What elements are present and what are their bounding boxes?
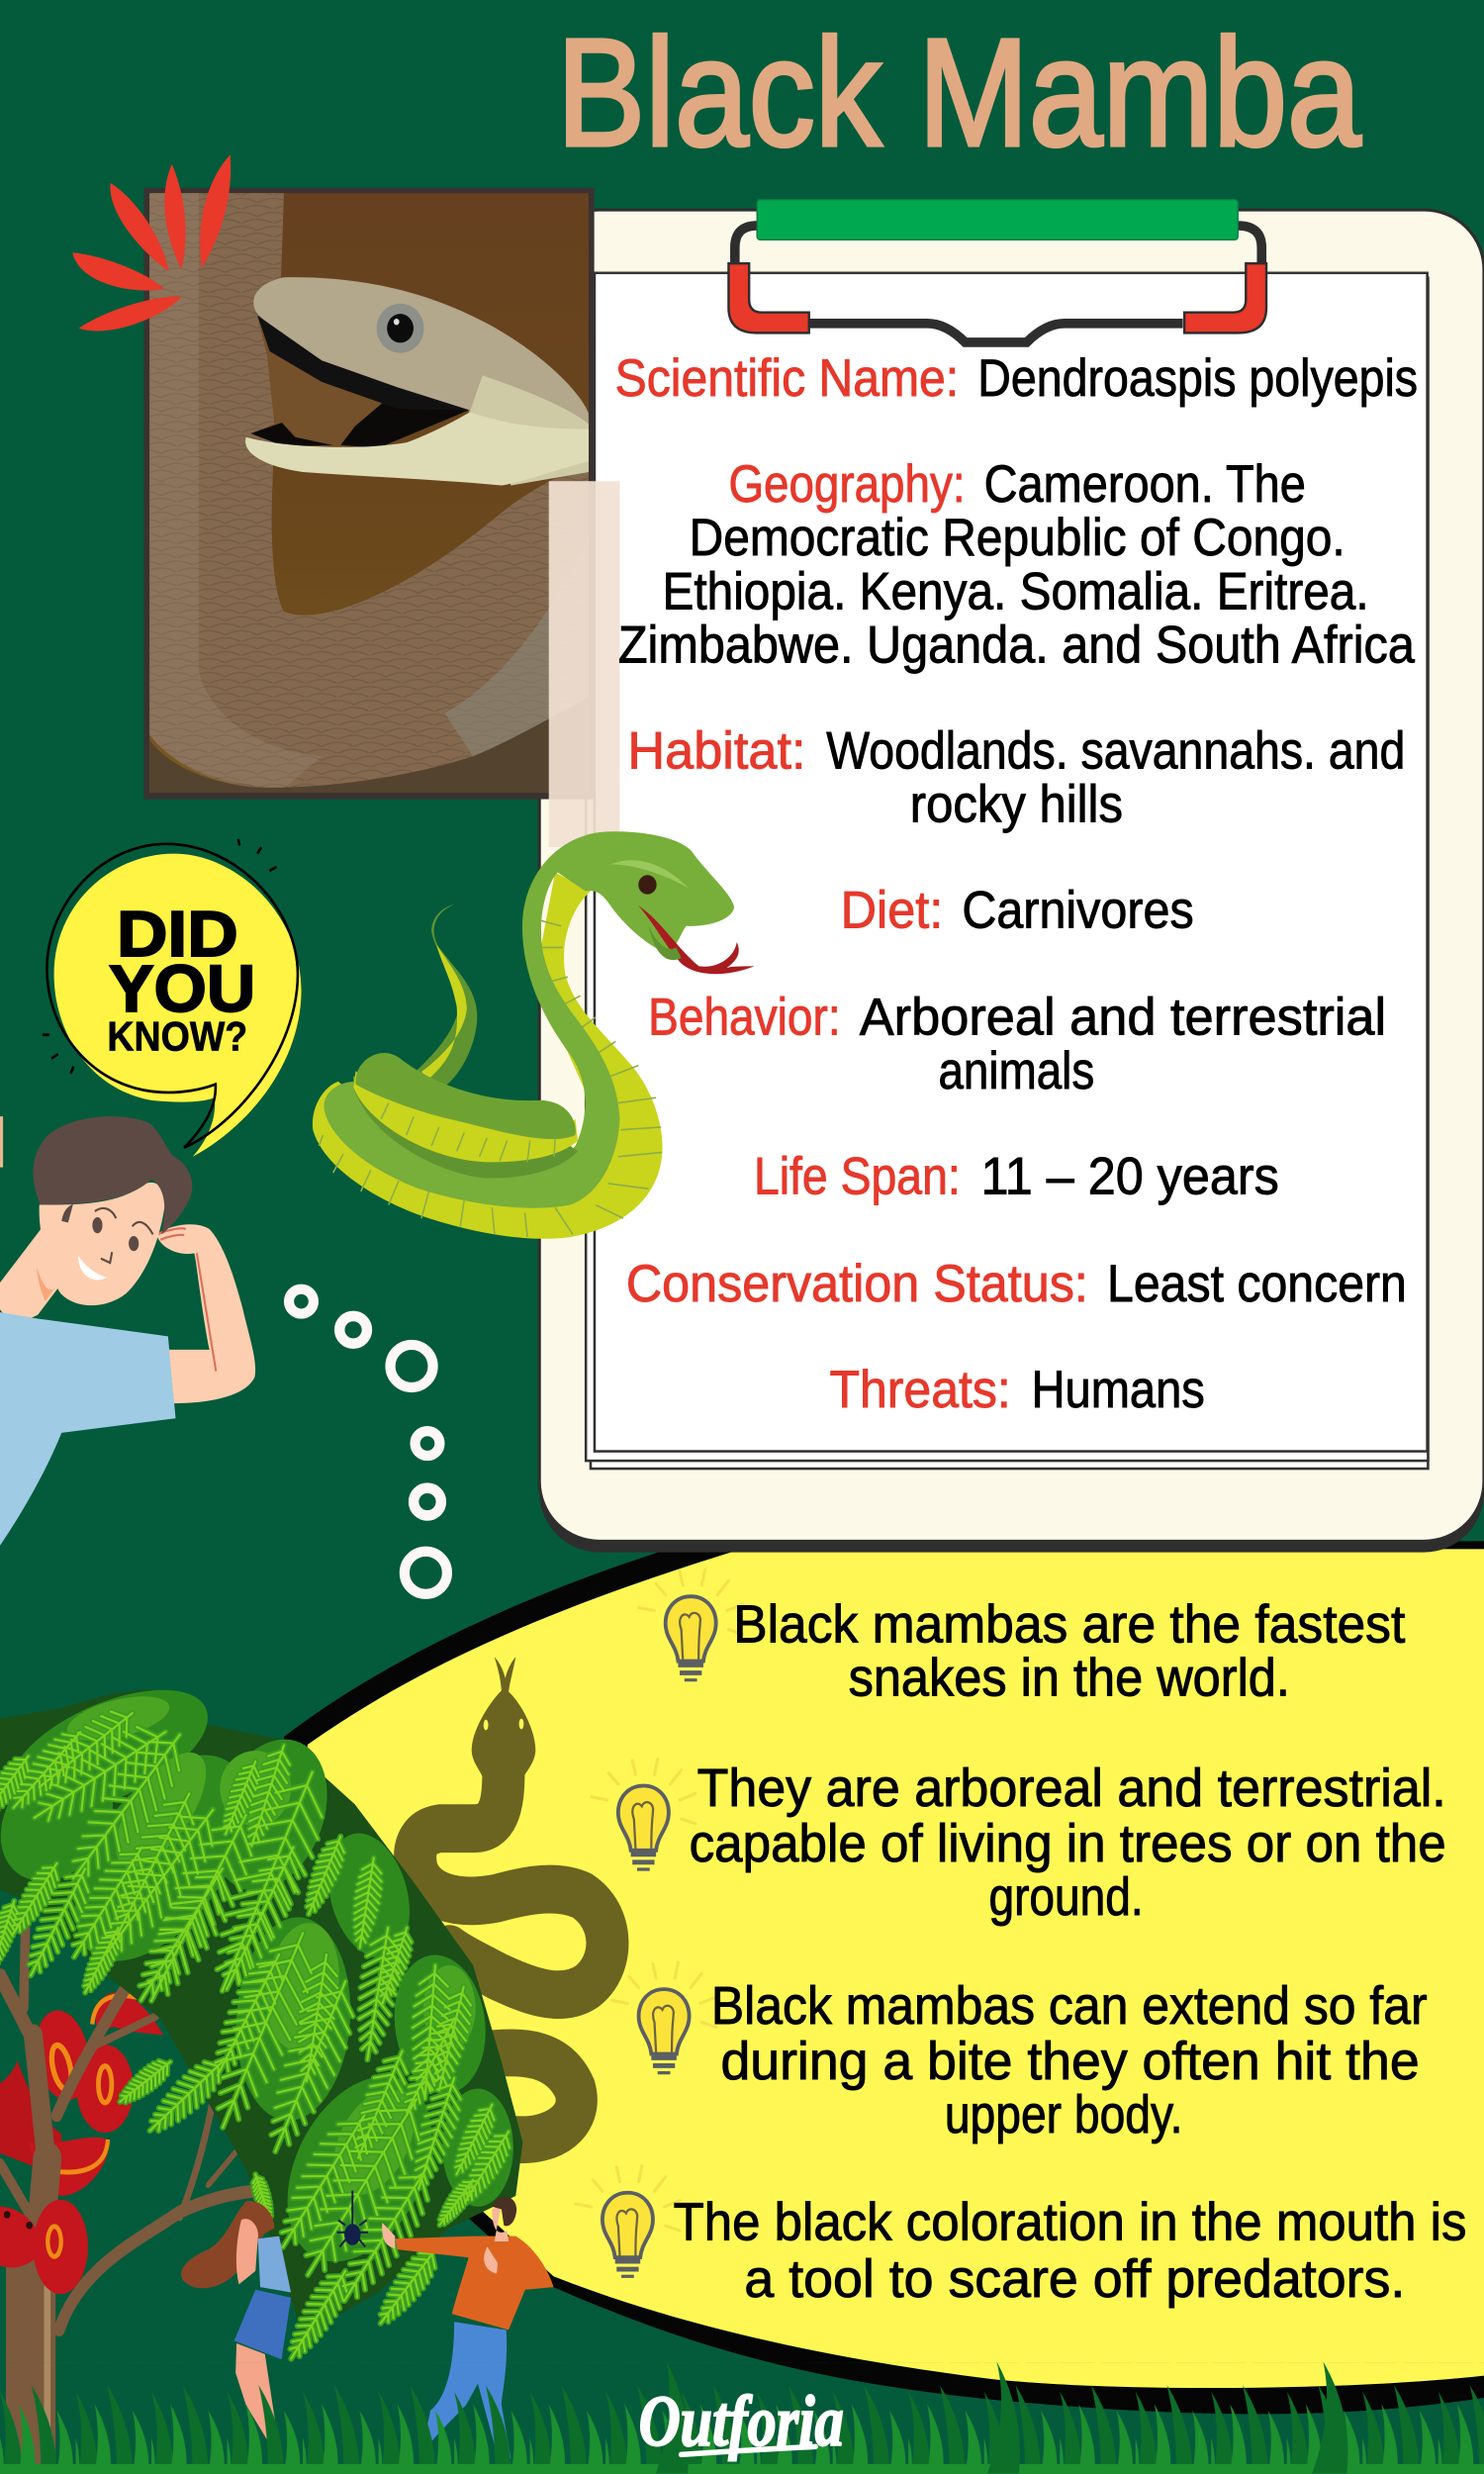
upper jaw <box>253 277 589 486</box>
tape strip <box>549 481 619 847</box>
neck <box>0 1226 58 1319</box>
fact 2: ground. <box>988 1867 1144 1927</box>
green back and head <box>324 831 734 1208</box>
snake body <box>149 193 589 788</box>
fact: geography: Zimbabwe. Uganda. and South Africa <box>618 617 1416 675</box>
foliage <box>0 1665 522 2368</box>
clip right red grip <box>1184 263 1266 333</box>
fact 3: upper body. <box>945 2085 1183 2144</box>
fact: life span: Life Span: <box>754 1148 961 1206</box>
red snake front coil and head <box>0 2200 88 2294</box>
fact: life span: 11 – 20 years <box>980 1148 1279 1206</box>
man <box>382 2197 554 2459</box>
girl <box>181 2201 291 2448</box>
clip wire <box>735 226 1261 342</box>
panel: clipboard <box>539 200 1484 1553</box>
fact: geography: Ethiopia. Kenya. Somalia. Eritrea. <box>663 562 1369 620</box>
fact 3: during a bite they often hit the <box>720 2032 1420 2091</box>
lower jaw <box>245 412 589 486</box>
fact: habitat: Habitat: <box>627 721 806 780</box>
illustration: thinking man <box>0 1116 255 1546</box>
tail <box>417 904 477 1087</box>
fact: threats <box>829 1361 1205 1419</box>
belly scale lines <box>319 920 662 1237</box>
fact 3: Black mambas can extend so far <box>711 1976 1428 2036</box>
eye <box>638 875 657 895</box>
text: did you know facts <box>674 1594 1466 2309</box>
clip green bar <box>757 200 1238 239</box>
icon: bulb 4 <box>576 2166 680 2278</box>
panel: yellow facts <box>284 1541 1484 2414</box>
arm <box>156 1224 255 1403</box>
grass <box>0 2361 1484 2474</box>
eye <box>377 304 423 353</box>
fact: conservation status: Conservation Status: <box>626 1255 1088 1313</box>
fact 2: capable of living in trees or on the <box>690 1814 1446 1873</box>
branch <box>149 698 589 793</box>
callout: did you know bubble <box>43 839 302 1157</box>
eyes and smile <box>61 1203 139 1251</box>
fact 2 <box>690 1759 1446 1927</box>
thought bubbles <box>289 1289 447 1594</box>
fact: scientific name: Dendroaspis polyepis <box>977 349 1418 408</box>
fact: behavior: Behavior: <box>648 989 841 1047</box>
icon: red burst <box>72 154 231 331</box>
hair <box>34 1116 192 1234</box>
shirt <box>0 1312 176 1546</box>
fact: behavior: animals <box>938 1042 1094 1100</box>
yellow fill <box>308 1549 1484 2388</box>
fact: geography <box>618 455 1416 675</box>
fact: geography: Geography: <box>728 455 966 514</box>
fact: geography: Cameroon. The <box>984 455 1306 514</box>
fact: habitat: Woodlands. savannahs. and <box>826 721 1405 780</box>
red snake back coils <box>0 1992 163 2196</box>
mouth interior <box>250 317 468 448</box>
illustration: green snake <box>313 831 755 1239</box>
fact 1: snakes in the world. <box>849 1649 1290 1708</box>
snake photo <box>143 188 595 800</box>
fact: scientific name <box>615 349 1418 408</box>
silhouette snake <box>416 1657 607 2140</box>
title: Black Mamba <box>557 7 1361 178</box>
fact: conservation status <box>626 1255 1407 1313</box>
fact 1: Black mambas are the fastest <box>733 1594 1405 1654</box>
fact 4: a tool to scare off predators. <box>744 2249 1405 2309</box>
fact: habitat <box>627 721 1405 834</box>
illustration: tree with red snake <box>0 1665 554 2459</box>
fact 3 <box>711 1976 1428 2144</box>
text: facts list on clipboard <box>615 349 1418 1419</box>
upper coil <box>355 1053 576 1139</box>
fact: threats: Threats: <box>829 1361 1011 1419</box>
fact: habitat: rocky hills <box>910 776 1123 834</box>
face <box>40 1183 165 1305</box>
fact: threats: Humans <box>1032 1361 1205 1419</box>
fact: life span <box>754 1148 1279 1206</box>
icon: bulb 3 <box>611 1962 716 2074</box>
logo: Outforia <box>639 2381 844 2461</box>
fact 1 <box>733 1594 1405 1708</box>
mouth and tongue <box>638 905 755 974</box>
fact 2: They are arboreal and terrestrial. <box>697 1759 1446 1818</box>
clip left red grip <box>728 263 809 333</box>
belly <box>313 873 663 1239</box>
callout: did you know bubble: KNOW? <box>107 1013 247 1060</box>
fact: behavior <box>648 989 1386 1100</box>
callout: did you know bubble: DID <box>117 898 238 970</box>
fact: diet <box>841 881 1194 939</box>
fact: behavior: Arboreal and terrestrial <box>860 989 1386 1047</box>
callout: did you know bubble: YOU <box>109 952 255 1026</box>
spider <box>336 2191 368 2246</box>
beads <box>0 1116 3 1168</box>
fact: diet: Diet: <box>841 881 943 939</box>
trunk and branches <box>0 1901 260 2459</box>
icon: bulb 1 <box>639 1570 743 1681</box>
fact: geography: Democratic Republic of Congo. <box>690 509 1345 567</box>
icon: bulb 2 <box>592 1759 696 1871</box>
coil shadow <box>353 1076 578 1179</box>
fact: conservation status: Least concern <box>1107 1255 1407 1313</box>
fact: diet: Carnivores <box>962 881 1194 939</box>
coil yellow band <box>353 1071 578 1162</box>
fact: scientific name: Scientific Name: <box>615 349 959 408</box>
fact 4 <box>674 2193 1466 2309</box>
